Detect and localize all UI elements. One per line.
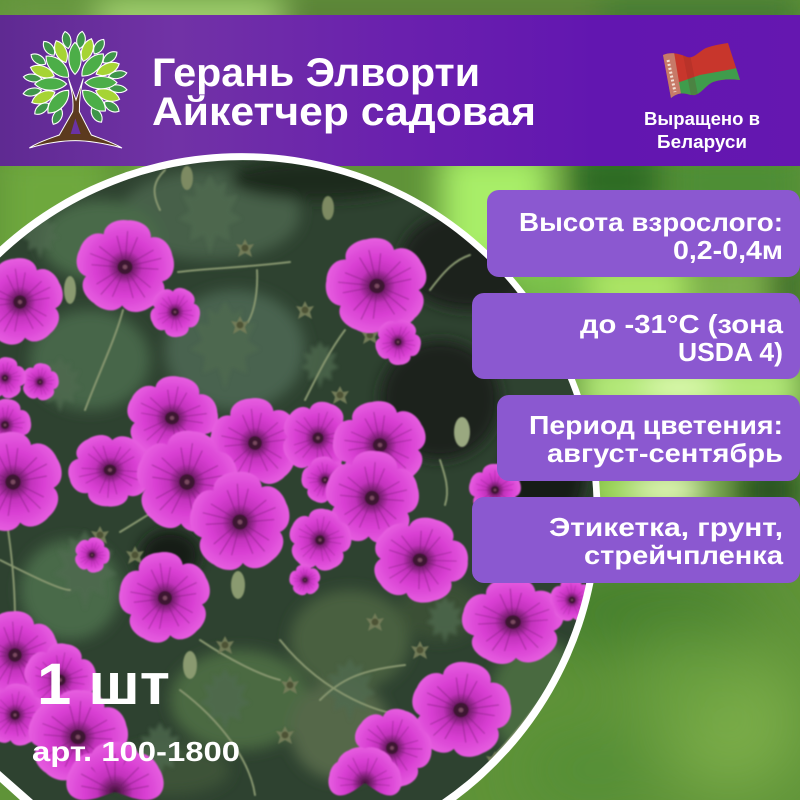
foliage backdrop [20, 160, 590, 795]
panel: flowering period: Период цветения: [529, 410, 783, 440]
title [152, 51, 536, 134]
panel: frost hardiness: USDA 4) [678, 337, 783, 367]
panel: height [487, 190, 800, 277]
jagged leaves [21, 175, 464, 778]
logo: tree [22, 31, 128, 148]
title: Герань Элворти [152, 51, 480, 95]
title: Айкетчер садовая [152, 90, 536, 134]
quantity: 1 шт [37, 652, 170, 717]
panel: flowering period [497, 395, 800, 481]
panel: package contents [472, 497, 800, 583]
icon: Belarus flag [663, 43, 740, 98]
panel: frost hardiness: до -31°С (зона [580, 309, 784, 339]
panel: frost hardiness [472, 293, 800, 379]
panel: height: Высота взрослого: [519, 207, 783, 237]
origin note: Выращено в [644, 109, 760, 129]
origin note [644, 109, 760, 152]
photo: geranium flowers in a circle [0, 150, 610, 800]
panel: height: 0,2-0,4м [673, 235, 783, 265]
stems and seed pods [0, 170, 570, 795]
flowers [0, 217, 598, 800]
panel: flowering period: август-сентябрь [547, 438, 783, 468]
white ring around photo [0, 153, 601, 800]
panel: package contents: Этикетка, грунт, [549, 512, 783, 542]
header band [0, 15, 800, 166]
article number: арт. 100-1800 [32, 736, 240, 767]
origin note: Беларуси [657, 132, 747, 152]
panel: package contents: стрейчпленка [584, 540, 784, 570]
